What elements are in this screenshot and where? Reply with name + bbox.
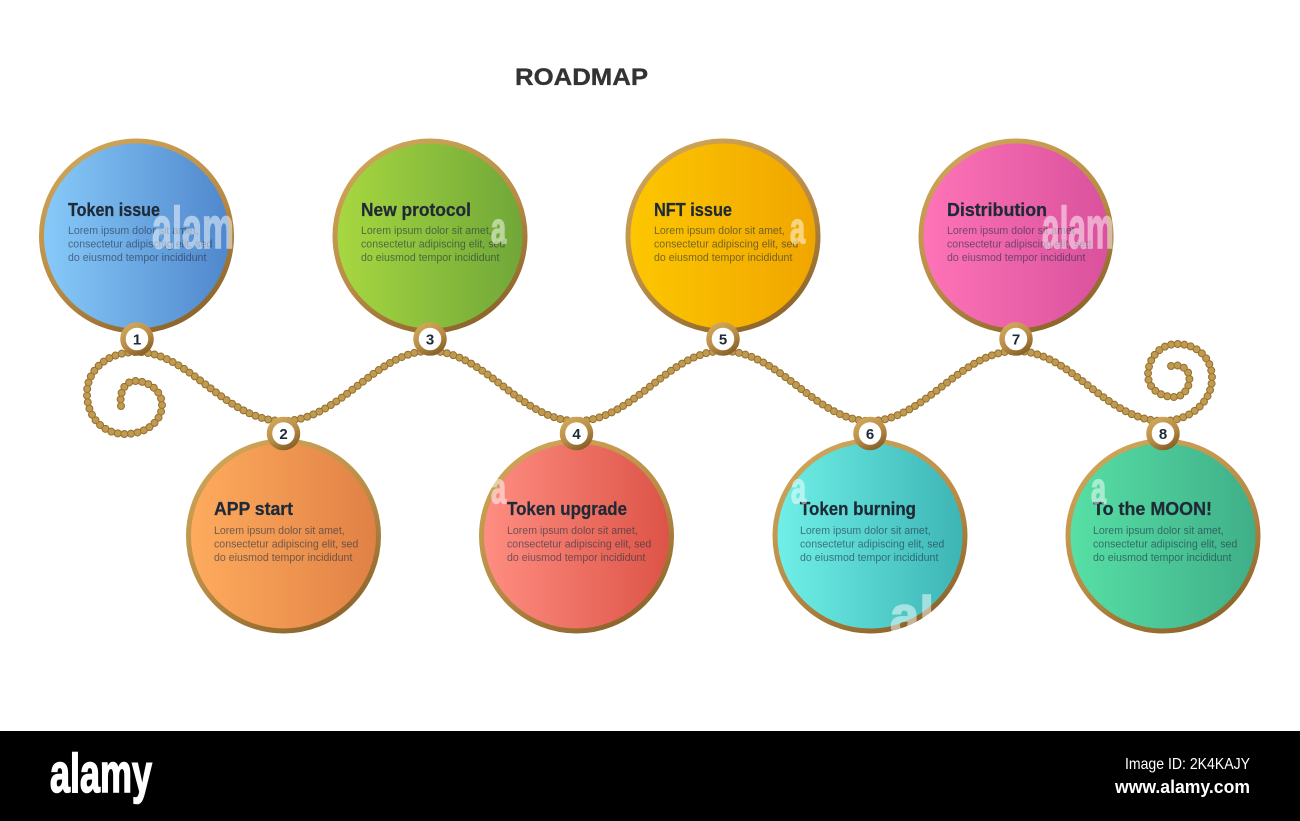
heading: To the MOON!: To the MOON! (1093, 499, 1212, 519)
watermark fragment: a (1091, 464, 1106, 513)
text block: step 3 description: Lorem ipsum dolor sit amet, (361, 225, 492, 237)
website: www.alamy.com (1114, 777, 1250, 797)
text block: step 4 description: do eiusmod tempor incididunt (507, 552, 645, 564)
badge: number 3 (416, 325, 444, 353)
panel: step 5 NFT issue (628, 141, 818, 353)
text block: step 5 description: consectetur adipiscing elit, sed (654, 238, 798, 250)
text block: step 5 description: do eiusmod tempor incididunt (654, 252, 792, 264)
badge: number 3: 3 (426, 332, 434, 348)
panel: step 2 APP start (188, 420, 378, 631)
watermark fragment: a (790, 204, 805, 253)
panel: step 4 Token upgrade (482, 420, 672, 631)
panel: step 8 To the MOON! (1068, 420, 1258, 631)
badge: number 7: 7 (1012, 332, 1020, 348)
badge: number 8: 8 (1159, 426, 1167, 443)
badge: number 6 (856, 420, 884, 448)
watermark fragment: a (791, 464, 806, 513)
footer bar (0, 731, 1300, 821)
badge: number 2 (270, 420, 298, 448)
image id: Image ID: 2K4KAJY (1125, 756, 1250, 773)
text block: step 2 description: consectetur adipiscing elit, sed (214, 538, 358, 550)
panel: step 1 Token issue (42, 141, 234, 353)
text block: step 4 description: Lorem ipsum dolor sit amet, (507, 525, 638, 537)
badge: number 5: 5 (719, 332, 727, 348)
badge: number 6: 6 (866, 426, 874, 443)
text block: step 4 description: consectetur adipiscing elit, sed (507, 538, 651, 550)
badge: number 4: 4 (572, 426, 581, 443)
heading: Token burning: Token burning (800, 499, 916, 519)
badge: number 1 (123, 325, 151, 353)
text block: step 2 description: do eiusmod tempor incididunt (214, 552, 352, 564)
text block: step 1 description: do eiusmod tempor incididunt (68, 252, 206, 264)
badge: number 8 (1149, 420, 1177, 448)
badge: number 1: 1 (133, 332, 141, 348)
text block: step 7 description: consectetur adipiscing elit, sed (947, 238, 1091, 250)
heading: Distribution: Distribution (947, 200, 1047, 220)
footer logo: alamy (50, 742, 152, 804)
text block: step 6 description: do eiusmod tempor incididunt (800, 552, 938, 564)
text block: step 3 description: do eiusmod tempor incididunt (361, 252, 499, 264)
text block: step 1 description: consectetur adipiscing elit, sed (68, 238, 212, 250)
badge: number 4 (562, 420, 590, 448)
text block: step 8 description: do eiusmod tempor incididunt (1093, 552, 1231, 564)
watermark fragment: alam (1042, 196, 1114, 261)
text block: step 3 description: consectetur adipiscing elit, sed (361, 238, 505, 250)
watermark fragment: alam (152, 196, 234, 261)
text block: step 7 description: Lorem ipsum dolor sit amet, (947, 225, 1078, 237)
badge: number 5 (709, 325, 737, 353)
text block: step 8 description: consectetur adipiscing elit, sed (1093, 538, 1237, 550)
badge: number 7 (1002, 325, 1030, 353)
heading: Token issue: Token issue (68, 200, 160, 220)
heading: New protocol: New protocol (361, 200, 471, 220)
heading: NFT issue: NFT issue (654, 200, 732, 220)
text block: step 1 description: Lorem ipsum dolor sit amet, (68, 225, 199, 237)
heading: APP start: APP start (214, 499, 293, 519)
watermark fragment: a (491, 464, 506, 513)
title: ROADMAP (515, 64, 648, 91)
badge: number 2: 2 (279, 426, 288, 443)
panel: step 3 New protocol (335, 141, 525, 353)
text block: step 6 description: consectetur adipiscing elit, sed (800, 538, 944, 550)
watermark fragment: a (491, 204, 506, 253)
heading: Token upgrade: Token upgrade (507, 499, 627, 519)
watermark fragment: al (890, 586, 934, 646)
text block: step 6 description: Lorem ipsum dolor sit amet, (800, 525, 931, 537)
text block: step 2 description: Lorem ipsum dolor sit amet, (214, 525, 345, 537)
text block: step 7 description: do eiusmod tempor incididunt (947, 252, 1085, 264)
beaded roadmap path with spirals (87, 344, 1212, 434)
panel: step 7 Distribution (921, 141, 1114, 353)
text block: step 5 description: Lorem ipsum dolor sit amet, (654, 225, 785, 237)
text block: step 8 description: Lorem ipsum dolor sit amet, (1093, 525, 1224, 537)
panel: step 6 Token burning (775, 420, 965, 646)
